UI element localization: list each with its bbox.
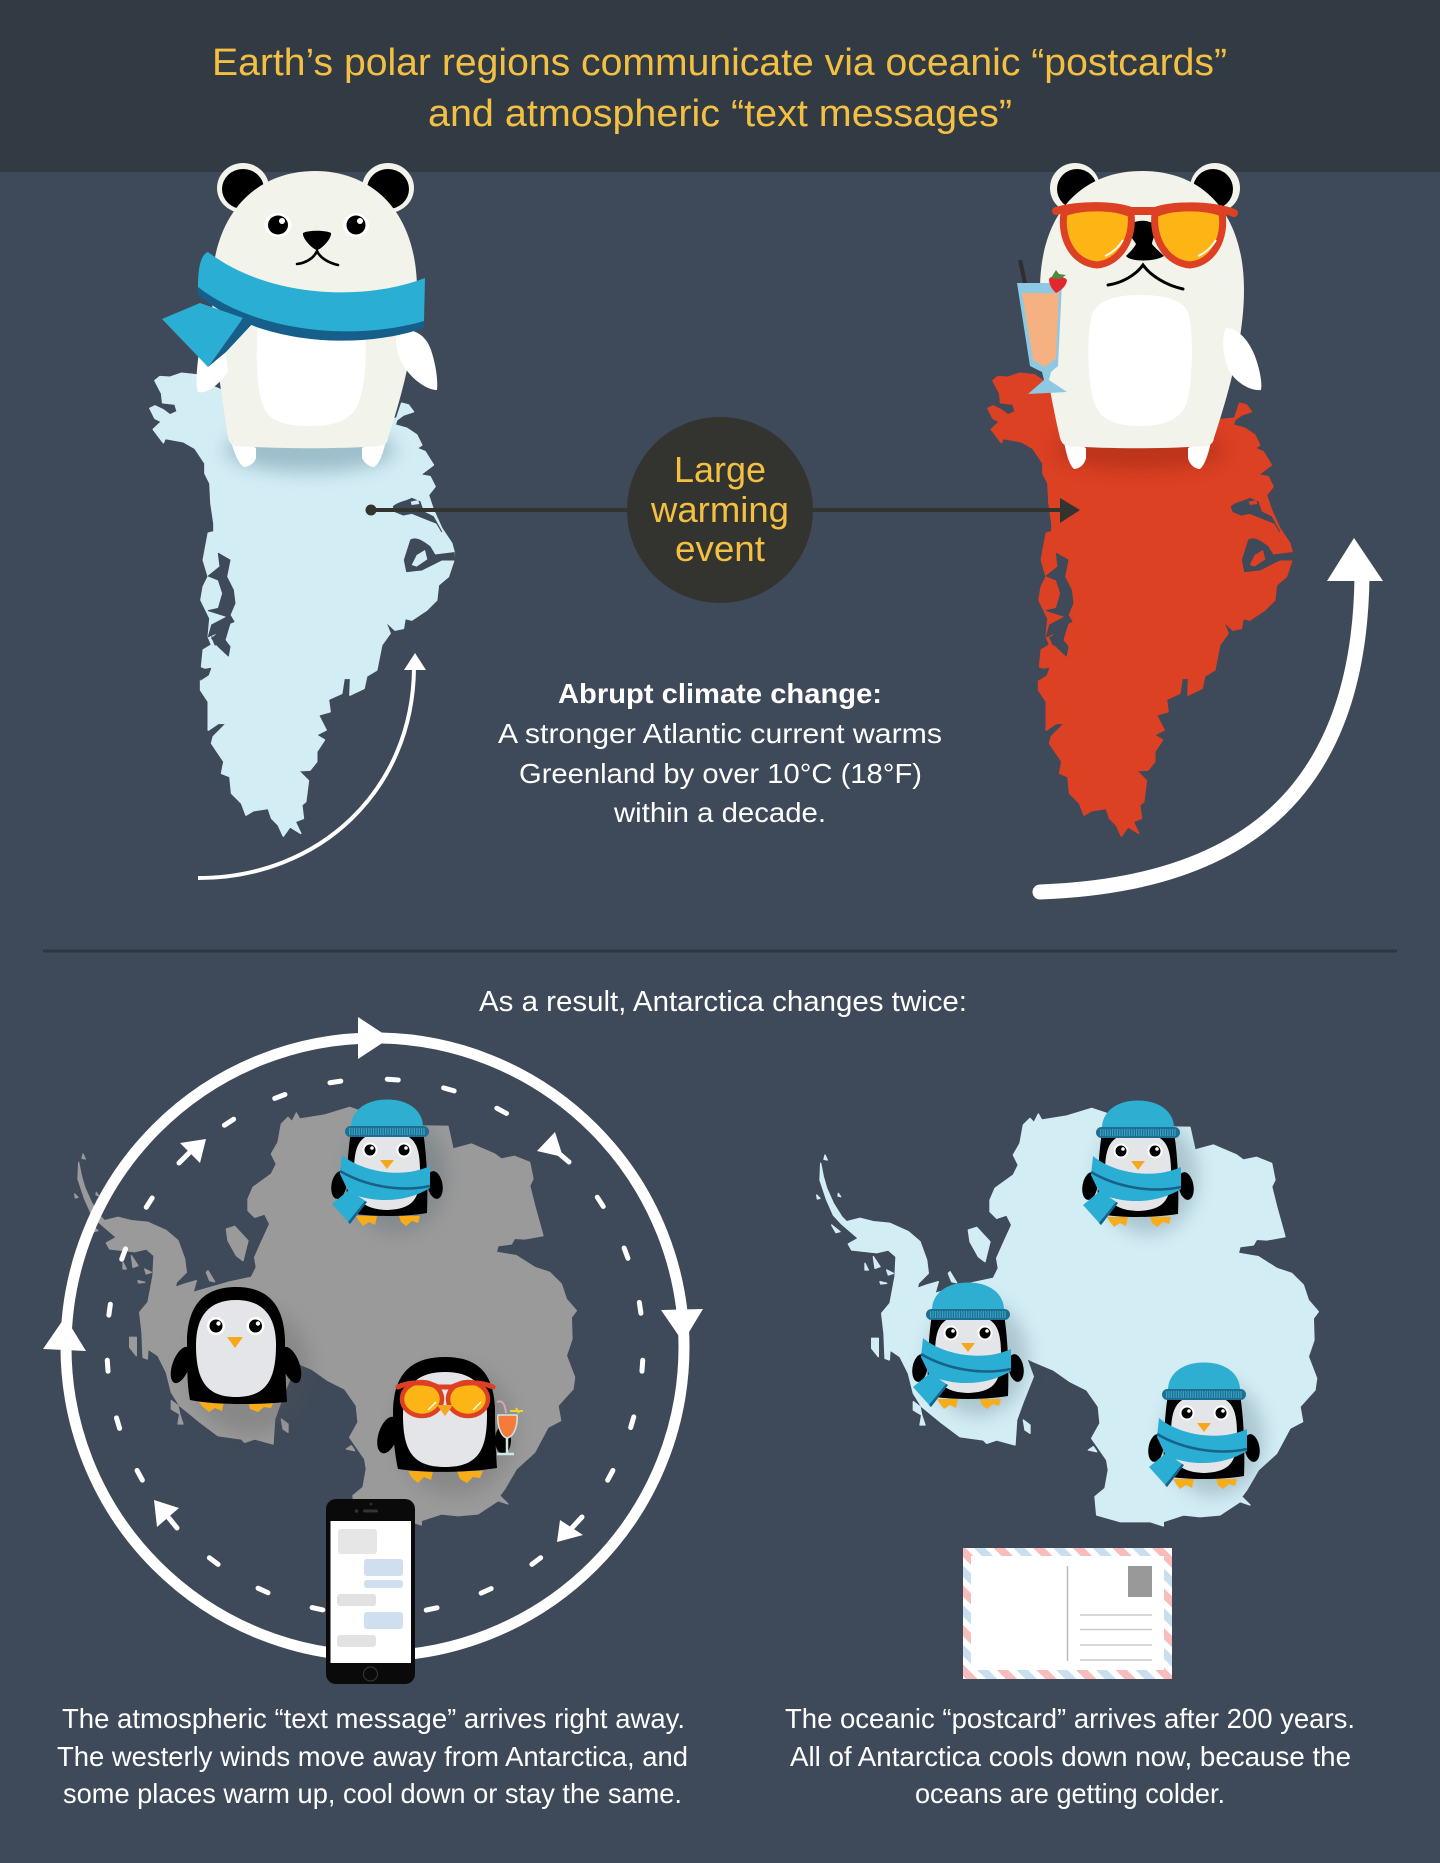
text: oceanic postcard: The oceanic “postcard” arrives after 200 years. bbox=[785, 1703, 1355, 1734]
callout: large warming event: event bbox=[675, 528, 765, 569]
map: grey Antarctica bbox=[75, 1107, 576, 1525]
callout: large warming event: warming bbox=[650, 489, 789, 530]
text: abrupt climate change: within a decade. bbox=[613, 797, 826, 828]
map: cold Greenland bbox=[150, 373, 454, 836]
text: oceanic postcard: All of Antarctica cools down now, because the bbox=[790, 1741, 1351, 1772]
text: abrupt climate change: A stronger Atlantic current warms bbox=[498, 718, 942, 749]
polar bear with sunglasses and drink bbox=[1017, 163, 1261, 469]
text: atmospheric text message: some places warm up, cool down or stay the same. bbox=[63, 1778, 682, 1809]
map: warm Greenland bbox=[988, 373, 1292, 836]
callout: large warming event bbox=[627, 417, 813, 603]
connector arrow: warming event bbox=[366, 498, 1080, 523]
text: atmospheric text message: The atmospheric “text message” arrives right away. bbox=[62, 1703, 685, 1734]
westerly winds dashed ring bbox=[105, 1077, 645, 1613]
bear shadow on cold Greenland bbox=[225, 428, 395, 472]
callout: large warming event: Large bbox=[674, 449, 766, 490]
penguin: sunglasses and cocktail bbox=[373, 1357, 523, 1495]
header band bbox=[0, 0, 1440, 172]
text: atmospheric text message bbox=[57, 1703, 688, 1809]
penguin: south, hat and scarf bbox=[1146, 1362, 1264, 1496]
atmospheric circulation ring bbox=[43, 1017, 703, 1656]
title: and atmospheric “text messages” bbox=[428, 93, 1012, 135]
penguin: west, hat and scarf bbox=[910, 1282, 1028, 1416]
icon: postcard bbox=[963, 1548, 1172, 1679]
text: abrupt climate change: Greenland by over 10°C (18°F) bbox=[519, 758, 922, 789]
title bbox=[212, 42, 1227, 135]
text: oceanic postcard bbox=[785, 1703, 1355, 1809]
text: abrupt climate change: Abrupt climate change: bbox=[558, 678, 882, 709]
text: oceanic postcard: oceans are getting colder. bbox=[915, 1778, 1225, 1809]
icon: phone with text messages bbox=[326, 1499, 415, 1684]
bear shadow on warm Greenland bbox=[1055, 430, 1225, 470]
penguin: unchanged bbox=[167, 1287, 310, 1435]
heading: as a result: As a result, Antarctica changes twice: bbox=[479, 986, 967, 1018]
map: pale blue Antarctica bbox=[817, 1108, 1318, 1526]
arrow: large temperature rise bbox=[1040, 538, 1383, 892]
penguin: north, hat and scarf bbox=[1080, 1100, 1198, 1234]
title: Earth’s polar regions communicate via oceanic “postcards” bbox=[212, 42, 1227, 84]
polar bear with scarf bbox=[162, 163, 437, 467]
penguin: hat and scarf on grey map bbox=[329, 1100, 447, 1233]
arrow: small temperature rise bbox=[198, 653, 426, 878]
text: abrupt climate change bbox=[498, 678, 942, 828]
text: atmospheric text message: The westerly winds move away from Antarctica, and bbox=[57, 1741, 688, 1772]
